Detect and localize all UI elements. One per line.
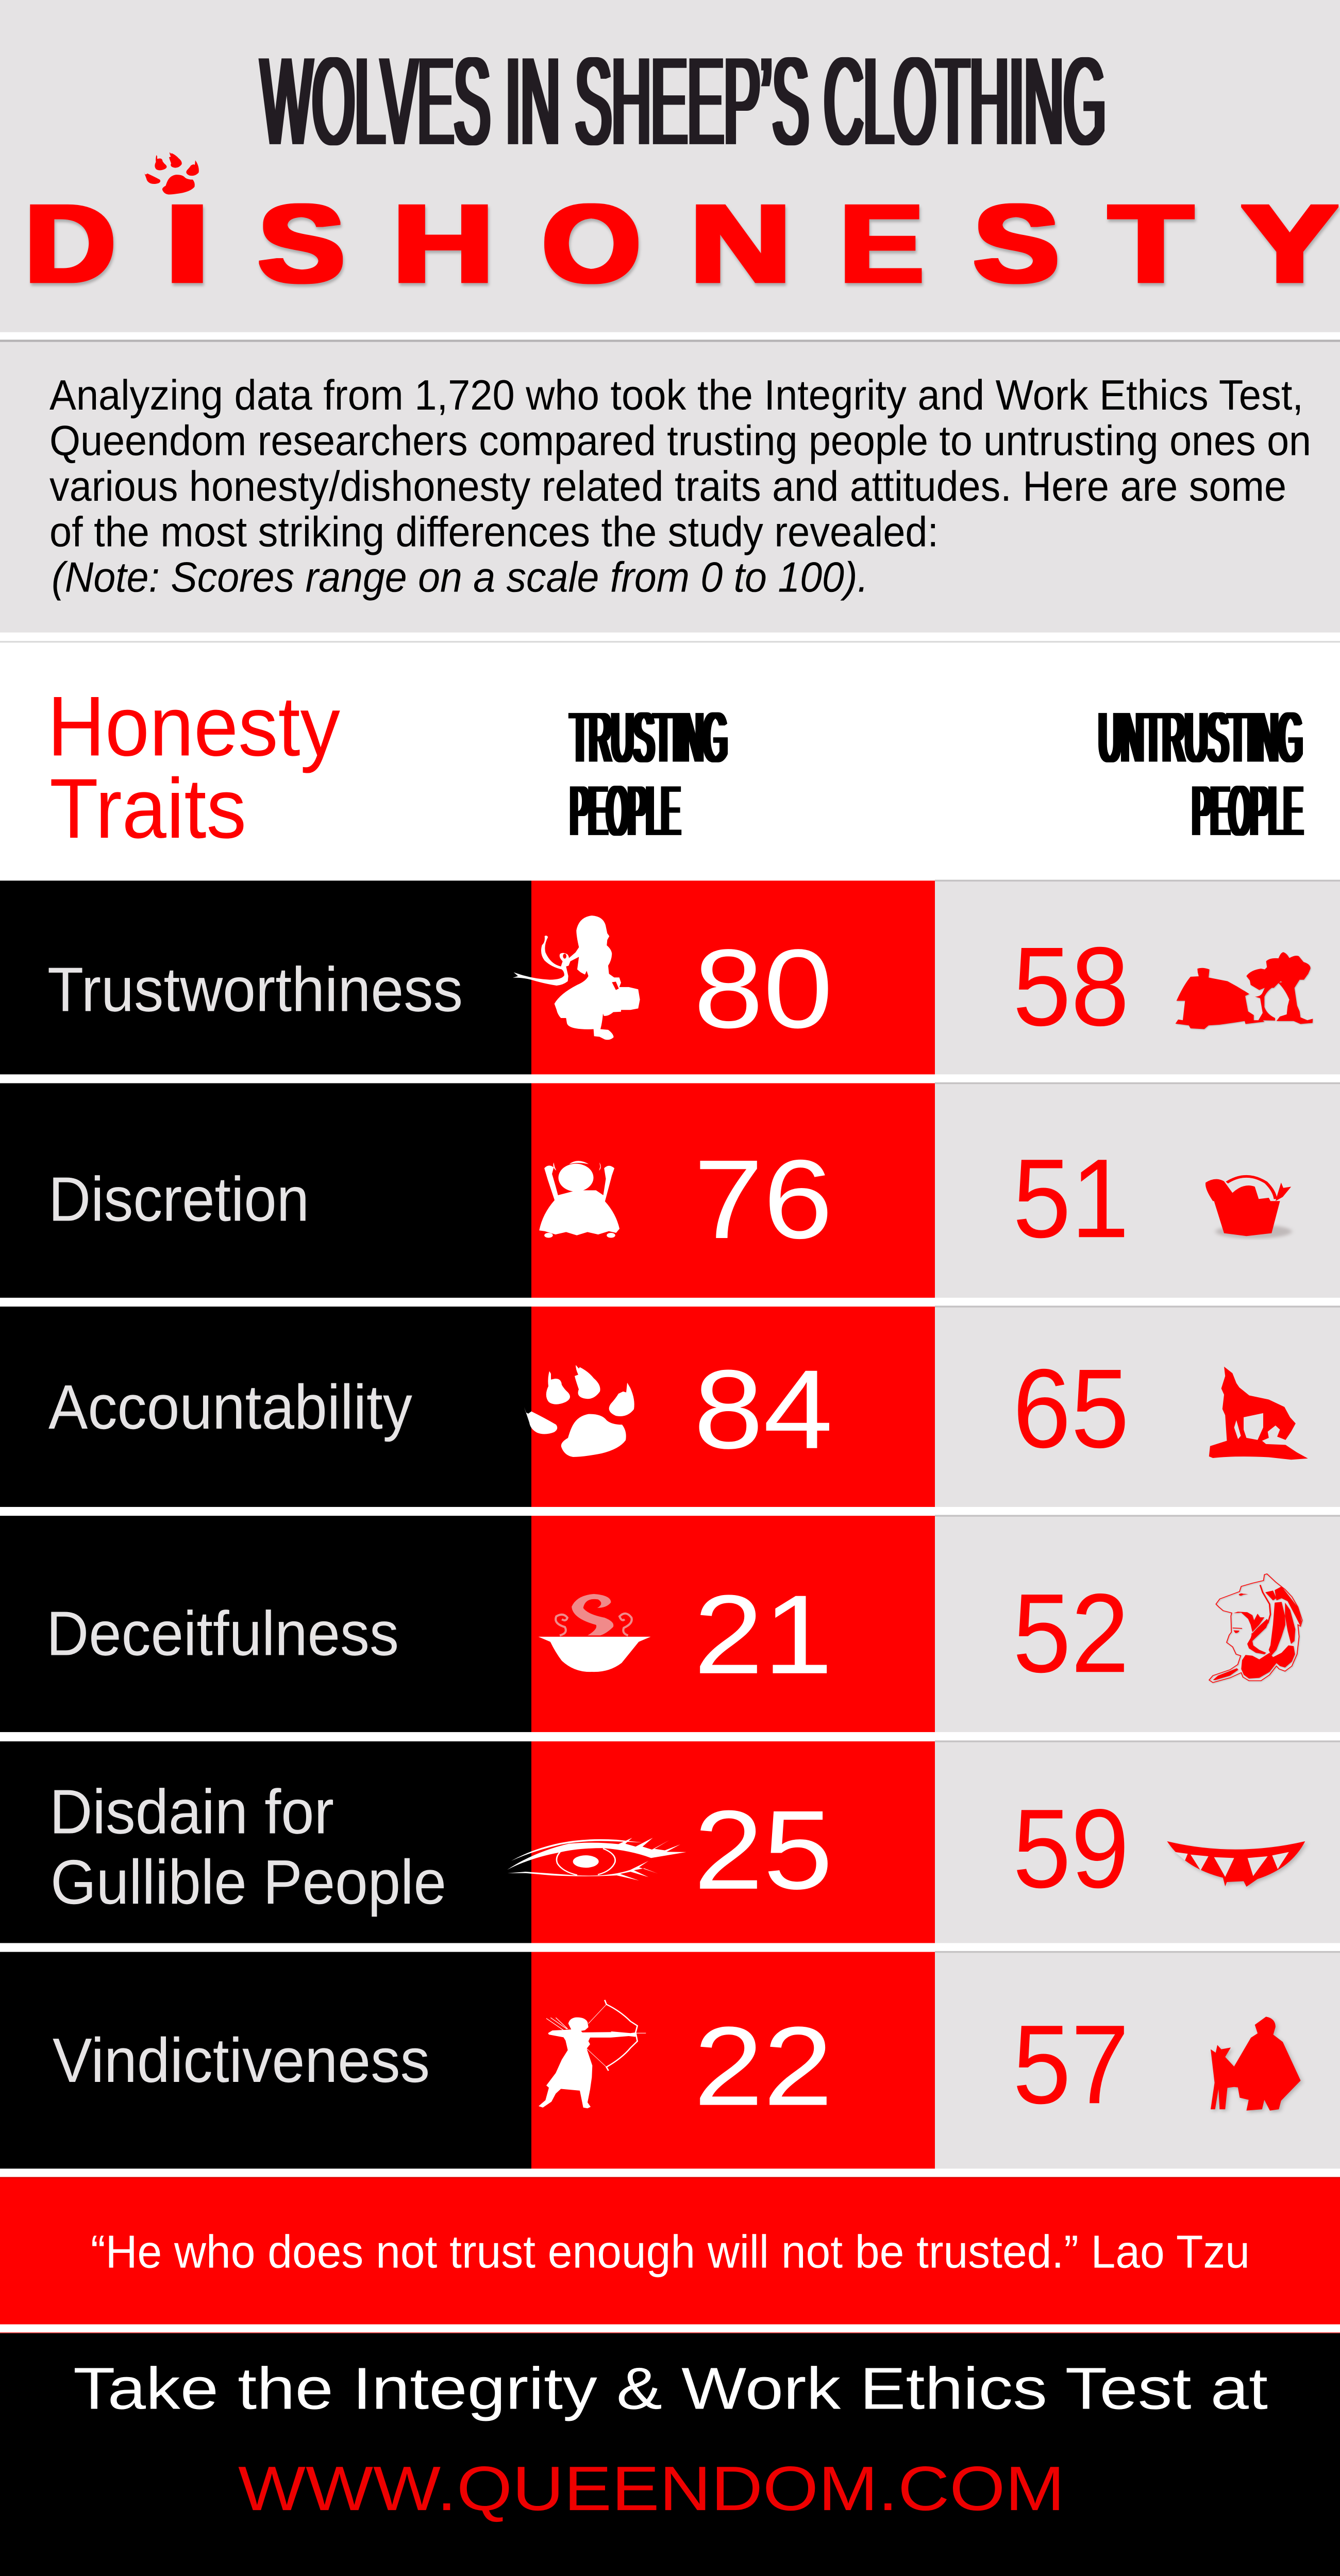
icon: toothy grin bbox=[1167, 1841, 1305, 1887]
heading: dishonesty: E bbox=[840, 182, 924, 305]
row: disdain for gullible people bbox=[0, 1740, 1340, 1943]
heading: dishonesty: I bbox=[163, 182, 211, 305]
call to action text: Take the Integrity & Work Ethics Test at bbox=[73, 2355, 1268, 2421]
heading: dishonesty: O bbox=[542, 182, 641, 305]
heading: untrusting people bbox=[1099, 698, 1302, 850]
heading: dishonesty: T bbox=[1109, 182, 1193, 305]
heading: trusting people bbox=[571, 698, 727, 850]
value: 76: 76 bbox=[694, 1137, 833, 1262]
icon: eye bbox=[507, 1838, 686, 1880]
heading: honesty traits: Honesty bbox=[47, 679, 340, 774]
value: 22: 22 bbox=[694, 2003, 833, 2129]
icon: howling wolf bbox=[1209, 1367, 1308, 1460]
heading: honesty traits: Traits bbox=[49, 761, 246, 856]
heading: dishonesty: S bbox=[974, 182, 1059, 305]
row: accountability bbox=[0, 1306, 1340, 1507]
icon: house and trees bbox=[1176, 952, 1313, 1029]
icon: girl in wolf pelt bbox=[1209, 1574, 1302, 1683]
website: WWW.QUEENDOM.COM bbox=[238, 2453, 1065, 2524]
panel: header bbox=[0, 0, 1340, 332]
heading: dishonesty: N bbox=[690, 182, 792, 305]
label: Discretion bbox=[48, 1164, 309, 1234]
icon: girl with basket bbox=[513, 916, 640, 1040]
row: deceitfulness bbox=[0, 1515, 1340, 1732]
panel: column headers: PEOPLE bbox=[571, 771, 680, 850]
intro text bbox=[49, 371, 1311, 601]
value: 21: 21 bbox=[694, 1571, 833, 1697]
label: Trustworthiness bbox=[47, 955, 463, 1025]
heading: dishonesty: H bbox=[392, 182, 494, 305]
label: Gullible People bbox=[51, 1847, 446, 1918]
heading: honesty traits bbox=[47, 679, 340, 856]
label: Vindictiveness bbox=[53, 2025, 430, 2096]
heading: dishonesty: S bbox=[258, 182, 345, 305]
panel: column headers bbox=[0, 641, 1340, 856]
icon: basket bbox=[1205, 1176, 1292, 1239]
label: Accountability bbox=[48, 1372, 412, 1443]
icon: cloaked figure with wolf bbox=[1211, 2016, 1301, 2111]
value: 57: 57 bbox=[1013, 2002, 1129, 2127]
icon: steaming bowl bbox=[539, 1594, 651, 1672]
panel: call to action bbox=[0, 2332, 1340, 2576]
value: 84: 84 bbox=[694, 1346, 833, 1472]
value: 51: 51 bbox=[1013, 1136, 1129, 1261]
value: 25: 25 bbox=[694, 1787, 833, 1912]
value: 59: 59 bbox=[1013, 1786, 1129, 1911]
heading: dishonesty bbox=[25, 182, 1338, 305]
label bbox=[49, 1777, 446, 1918]
icon: red paw above the I bbox=[144, 152, 199, 194]
row: vindictiveness bbox=[0, 1951, 1340, 2168]
heading: dishonesty: Y bbox=[1242, 182, 1338, 305]
label: Disdain for bbox=[49, 1777, 334, 1847]
panel: column headers: TRUSTING bbox=[571, 698, 727, 777]
value: 52: 52 bbox=[1013, 1570, 1129, 1696]
value: 58: 58 bbox=[1013, 924, 1129, 1049]
row: discretion bbox=[0, 1082, 1340, 1298]
icon: archer bbox=[539, 2000, 646, 2108]
row: trustworthiness bbox=[0, 880, 1340, 1074]
icon: white paw bbox=[524, 1365, 634, 1457]
heading: dishonesty: D bbox=[25, 182, 115, 305]
panel: quote bbox=[0, 2177, 1340, 2325]
intro text: of the most striking differences the study revealed: bbox=[49, 508, 939, 555]
intro text: (Note: Scores range on a scale from 0 to 100). bbox=[52, 554, 868, 601]
icon: girl with raised arms bbox=[539, 1161, 619, 1238]
panel: introduction bbox=[0, 340, 1340, 633]
label: Deceitfulness bbox=[46, 1599, 399, 1669]
value: 65: 65 bbox=[1013, 1346, 1129, 1471]
value: 80: 80 bbox=[694, 926, 833, 1052]
